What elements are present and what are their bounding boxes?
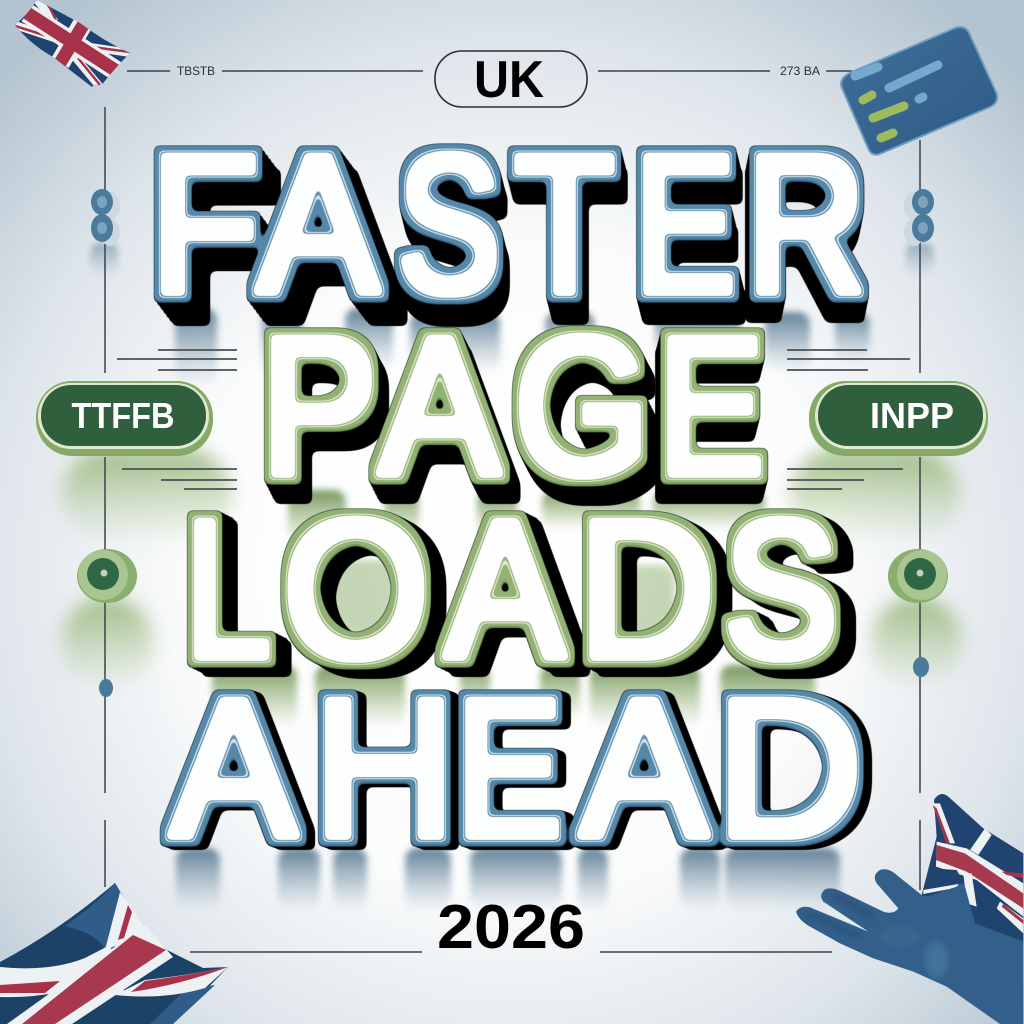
TTFFB pill	[36, 381, 213, 456]
pill label: UK: UK	[474, 51, 544, 109]
heading word: LOADS	[185, 478, 838, 700]
heading word: AHEAD: E	[456, 658, 562, 878]
UK flag bottom right	[922, 794, 1023, 943]
code card top right	[841, 27, 997, 155]
green glow behind side pills	[62, 450, 962, 688]
card code bars	[855, 65, 938, 138]
UK flag bottom left	[0, 883, 228, 1024]
heading word: LOADS: O	[282, 478, 430, 699]
heading word: AHEAD: D	[716, 659, 863, 878]
heading word: FASTER: E	[634, 115, 736, 335]
frame lines	[105, 71, 920, 952]
letter cast shadows	[90, 243, 934, 910]
INPP pill	[809, 381, 988, 456]
heading word: AHEAD: A	[580, 658, 708, 879]
heading word: PAGE: E	[658, 296, 764, 516]
heading word: LOADS: A	[445, 479, 565, 699]
small coin right	[913, 657, 929, 677]
pill label: INPP: INPP	[870, 395, 954, 436]
heading word: PAGE	[261, 295, 764, 517]
heading word: FASTER	[150, 113, 866, 335]
heading word: LOADS: L	[185, 479, 271, 699]
heading word: FASTER: T	[514, 115, 615, 334]
heading word: LOADS: S	[724, 480, 838, 700]
blue coins right	[904, 189, 934, 246]
icon: UK flag top left	[15, 0, 130, 87]
heading word: PAGE: P	[261, 295, 377, 516]
heading word: AHEAD: A	[170, 657, 297, 878]
green button right	[888, 549, 948, 603]
heading word: FASTER: A	[257, 115, 379, 335]
green button left	[77, 549, 137, 603]
pill label: TTFFB: TTFFB	[72, 395, 174, 436]
heading word: AHEAD: H	[313, 658, 456, 878]
top right label: 273 BA	[780, 64, 820, 78]
heading word: FASTER: R	[746, 113, 866, 334]
heading word: PAGE: G	[514, 295, 650, 516]
top left label: TBSTB	[177, 64, 215, 78]
heading word: FASTER: S	[398, 115, 500, 334]
icon: blue hand	[796, 869, 1023, 1024]
heading word: PAGE: A	[379, 297, 500, 517]
heading word: FASTER: F	[150, 114, 259, 334]
hand highlights	[807, 895, 948, 978]
UK pill	[435, 51, 587, 109]
small coin left	[99, 679, 113, 697]
year: 2026: 2026	[437, 893, 585, 962]
heading word: AHEAD	[170, 657, 863, 879]
heading word: LOADS: D	[578, 479, 715, 700]
blue coins left	[91, 189, 120, 246]
